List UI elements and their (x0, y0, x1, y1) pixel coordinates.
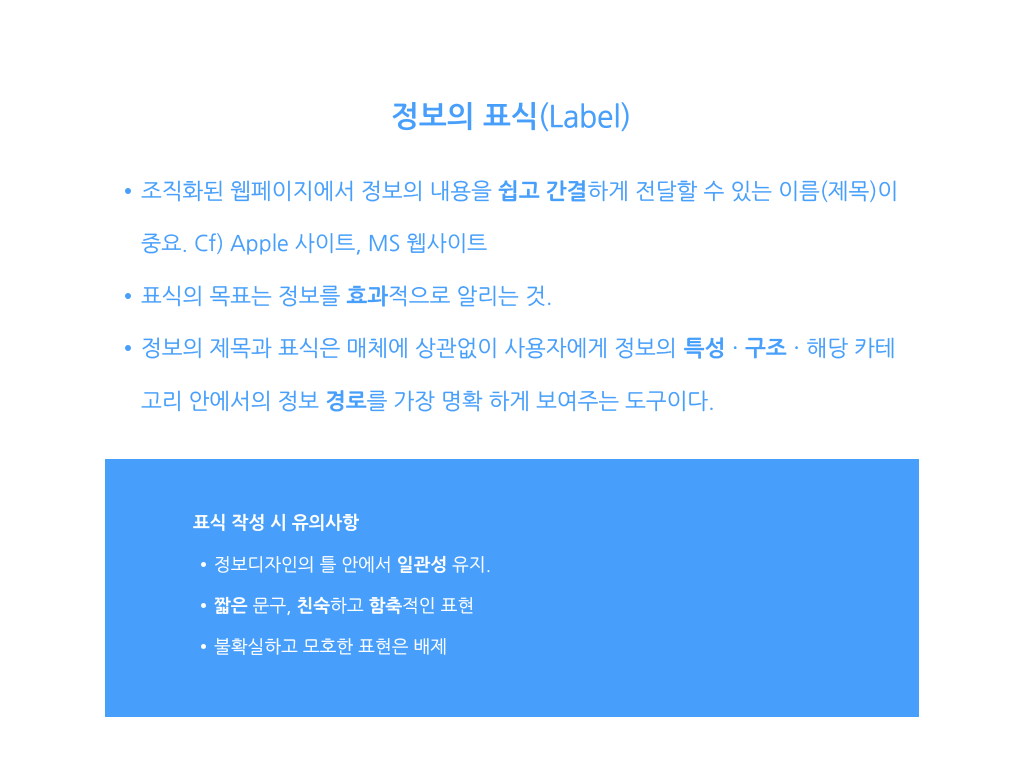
note: concise wording: 짧은 문구, 친숙하고 함축적인 표현 (214, 597, 474, 615)
text block: bullet list: 정보의 제목과 표식은 매체에 상관없이 사용자에게 정보의 특성 · 구조 · 해당 카테 (141, 338, 896, 360)
text block: bullet list: 표식의 목표는 정보를 효과적으로 알리는 것. (141, 286, 552, 308)
text block: bullet list: 중요. Cf) Apple 사이트, MS 웹사이트 (141, 234, 487, 255)
text block: bullet list (125, 180, 898, 413)
text block: bullet list: 고리 안에서의 정보 경로를 가장 명확 하게 보여주는 도구이다. (141, 391, 715, 413)
note: avoid ambiguity: 불확실하고 모호한 표현은 배제 (214, 638, 447, 656)
panel: label writing notes (105, 459, 918, 717)
note: consistency: 정보디자인의 틀 안에서 일관성 유지. (214, 556, 491, 574)
text block: bullet list: 조직화된 웹페이지에서 정보의 내용을 쉽고 간결하게 전달할 수 있는 이름(제목)이 (141, 181, 898, 203)
panel heading: 표식 작성 시 유의사항 (193, 514, 359, 532)
title: 정보의 표식(Label) (391, 103, 631, 132)
